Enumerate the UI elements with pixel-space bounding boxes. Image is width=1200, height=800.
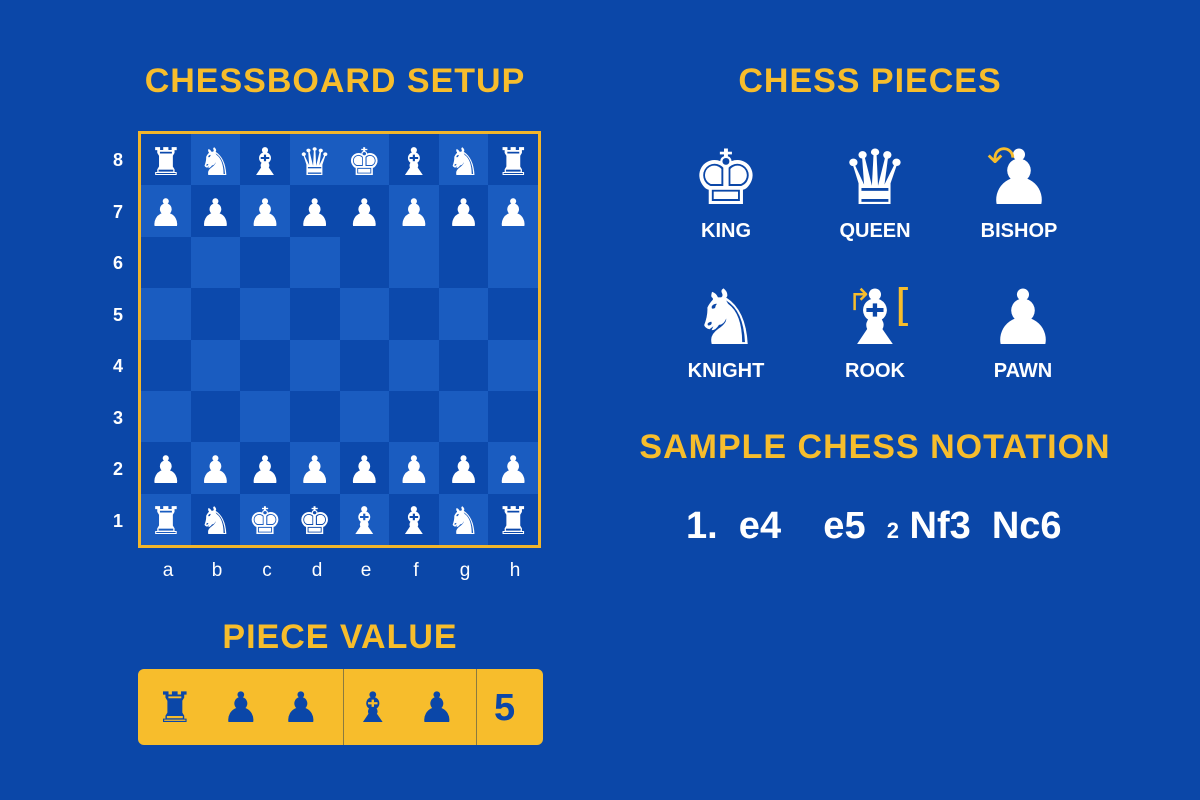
chessboard: ♟ — [248, 191, 282, 235]
title: chessboard setup: CHESSBOARD SETUP — [145, 62, 525, 100]
text: 8 — [113, 150, 123, 170]
chessboard: ♟ — [347, 191, 381, 235]
file labels — [163, 560, 520, 581]
chessboard: ♟ — [447, 448, 481, 492]
text: h — [510, 560, 520, 581]
text: c — [262, 560, 272, 581]
piece: rook: ROOK — [845, 360, 905, 382]
chessboard: ♟ — [149, 191, 183, 235]
piece: knight: KNIGHT — [688, 360, 764, 382]
text: d — [312, 560, 322, 581]
piece: queen: ♛ — [841, 133, 909, 222]
chessboard: ♟ — [298, 191, 332, 235]
chessboard: ♝ — [248, 140, 282, 184]
text: 6 — [113, 253, 123, 273]
piece: queen: QUEEN — [839, 220, 911, 242]
piece value bar: ♟ — [418, 683, 456, 732]
piece: pawn: ♟ — [989, 273, 1057, 362]
chessboard: ♜ — [496, 140, 530, 184]
text: e — [361, 560, 371, 581]
text: f — [413, 560, 419, 581]
heading: piece value: PIECE VALUE — [222, 618, 458, 656]
chessboard: ♝ — [397, 140, 431, 184]
text: 2 — [113, 459, 123, 479]
chessboard: ♟ — [347, 448, 381, 492]
piece value bar: ♝ — [354, 683, 392, 732]
text: 5 — [113, 305, 123, 325]
chessboard: ♟ — [447, 191, 481, 235]
chessboard: ♞ — [447, 140, 481, 184]
piece: knight: ♞ — [692, 273, 760, 362]
rank labels — [113, 150, 123, 531]
piece value bar: ♟ — [222, 683, 260, 732]
chessboard: ♞ — [447, 499, 481, 543]
chessboard: ♟ — [496, 448, 530, 492]
heading: sample chess notation: SAMPLE CHESS NOTATION — [639, 428, 1111, 466]
piece: bishop: ♟ — [985, 133, 1053, 222]
chessboard: ♟ — [397, 448, 431, 492]
text: a — [163, 560, 173, 581]
piece: bishop: ↶ — [987, 139, 1016, 179]
piece: bishop: BISHOP — [981, 220, 1057, 242]
chessboard: ♟ — [198, 191, 232, 235]
piece value bar: ♟ — [282, 683, 320, 732]
chessboard: ♟ — [397, 191, 431, 235]
chessboard: ♞ — [198, 140, 232, 184]
chessboard: ♞ — [198, 499, 232, 543]
piece: rook: ♝ — [841, 273, 909, 362]
notation text: 1. e4 e5 2 Nf3 Nc6 — [686, 505, 1062, 547]
piece: pawn: PAWN — [994, 360, 1052, 382]
text: 3 — [113, 408, 123, 428]
piece: king: KING — [701, 220, 751, 242]
chessboard: ♟ — [298, 448, 332, 492]
chessboard: ♚ — [248, 499, 282, 543]
chessboard: ♚ — [347, 140, 381, 184]
chessboard: ♚ — [298, 499, 332, 543]
chessboard: ♜ — [149, 499, 183, 543]
text: b — [212, 560, 222, 581]
chessboard — [138, 131, 541, 548]
text: g — [460, 560, 470, 581]
text: 4 — [113, 356, 123, 376]
chessboard: ♟ — [149, 448, 183, 492]
text: 1 — [113, 511, 123, 531]
chessboard: ♟ — [198, 448, 232, 492]
chessboard: ♝ — [397, 499, 431, 543]
piece value bar: 5 — [494, 687, 515, 729]
piece: rook: [ — [895, 280, 912, 331]
chessboard: ♜ — [496, 499, 530, 543]
chessboard: ♝ — [347, 499, 381, 543]
piece value bar: ♜ — [156, 683, 194, 732]
chessboard: ♜ — [149, 140, 183, 184]
text: 7 — [113, 202, 123, 222]
piece: rook: ↱ — [847, 283, 872, 318]
chessboard: ♟ — [496, 191, 530, 235]
chessboard: ♟ — [248, 448, 282, 492]
piece value bar — [138, 669, 543, 745]
title: chess pieces: CHESS PIECES — [738, 62, 1002, 100]
piece: king: ♚ — [692, 133, 760, 222]
chessboard: ♛ — [298, 140, 332, 184]
